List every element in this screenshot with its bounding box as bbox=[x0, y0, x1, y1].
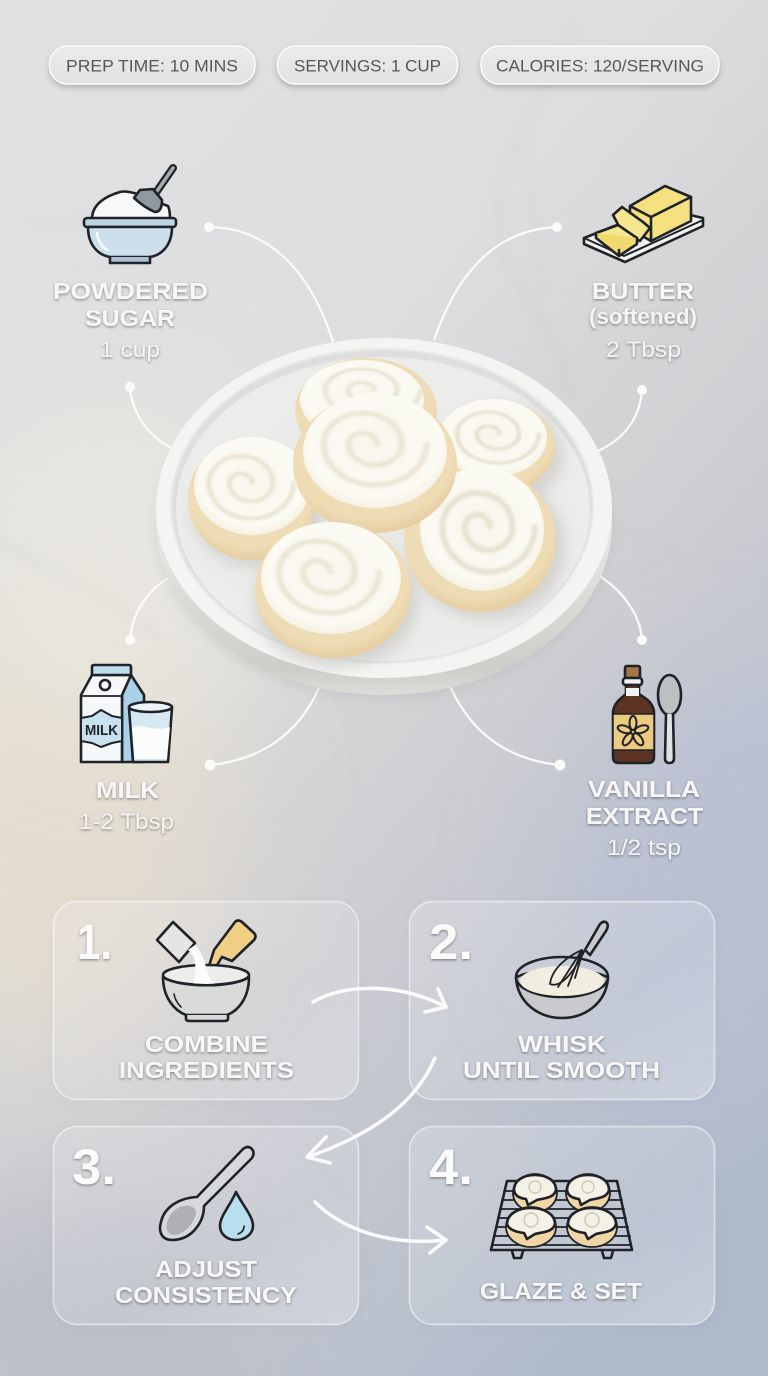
icon: pouring into bowl bbox=[157, 920, 256, 1021]
ingredient: butter bbox=[584, 186, 703, 304]
step label bbox=[463, 1031, 660, 1083]
pill: calories bbox=[481, 46, 719, 84]
label: extract: EXTRACT bbox=[586, 803, 703, 829]
cookie: left bbox=[188, 437, 316, 560]
icon: milk carton and glass bbox=[81, 665, 172, 762]
stats pills bbox=[50, 46, 719, 84]
arrow: step 3 to step 4 bbox=[315, 1202, 446, 1253]
ingredient: vanilla bbox=[613, 666, 681, 763]
panel: step 4 bbox=[410, 1126, 714, 1324]
pill: prep time bbox=[50, 46, 255, 84]
step label: CONSISTENCY bbox=[115, 1282, 297, 1308]
pill: servings: SERVINGS: 1 CUP bbox=[294, 56, 441, 76]
label: sugar: SUGAR bbox=[85, 305, 175, 331]
step number: 2. bbox=[429, 914, 473, 970]
plate bbox=[156, 338, 612, 698]
label: milk: MILK bbox=[96, 777, 159, 803]
step label: ADJUST bbox=[155, 1256, 257, 1282]
step number: 3. bbox=[72, 1139, 116, 1195]
connector lines bbox=[125, 222, 647, 770]
step label: UNTIL SMOOTH bbox=[463, 1057, 660, 1083]
step label: GLAZE & SET bbox=[480, 1278, 642, 1304]
cookie: right front bbox=[404, 467, 556, 612]
ingredient: milk bbox=[81, 665, 172, 762]
step label bbox=[115, 1256, 297, 1308]
label: POWDERED bbox=[53, 278, 208, 304]
pill: calories: CALORIES: 120/SERVING bbox=[496, 56, 704, 76]
panel: step 1 bbox=[54, 902, 358, 1100]
label: BUTTER bbox=[592, 278, 694, 304]
quantity: milk: 1-2 Tbsp bbox=[79, 809, 174, 834]
step label: COMBINE bbox=[145, 1031, 268, 1057]
ingredient: powdered sugar bbox=[53, 168, 208, 304]
step number: 1. bbox=[77, 914, 112, 970]
icon: vanilla bottle and spoon bbox=[613, 666, 681, 763]
label: vanilla: VANILLA bbox=[588, 776, 700, 802]
panel: step 3 bbox=[54, 1126, 358, 1324]
cookie: back bbox=[295, 358, 437, 462]
icon: butter on a dish bbox=[584, 186, 703, 262]
icon: spoon and droplet bbox=[160, 1147, 254, 1240]
icon: sugar bowl with scoop bbox=[84, 168, 176, 263]
cookie: right back bbox=[439, 399, 555, 493]
pill: prep time: PREP TIME: 10 MINS bbox=[66, 56, 238, 76]
arrow: step 1 to step 2 bbox=[313, 988, 446, 1012]
panel: step 2 bbox=[410, 902, 714, 1100]
step label: WHISK bbox=[518, 1031, 606, 1057]
note: softened: (softened) bbox=[589, 304, 697, 329]
step label: INGREDIENTS bbox=[119, 1057, 294, 1083]
quantity: sugar: 1 cup bbox=[100, 337, 160, 362]
arrow: step 2 to step 3 bbox=[307, 1058, 435, 1163]
icon: whisk in bowl bbox=[516, 922, 608, 1018]
cookie: center bbox=[293, 394, 457, 533]
cookie shadows bbox=[192, 405, 566, 668]
cookie: front bbox=[255, 522, 411, 658]
step number: 4. bbox=[429, 1139, 473, 1195]
pill: servings bbox=[278, 46, 458, 84]
quantity: vanilla: 1/2 tsp bbox=[607, 835, 681, 860]
icon: cookies on cooling rack bbox=[491, 1174, 632, 1258]
quantity: butter: 2 Tbsp bbox=[606, 337, 681, 362]
carton text: MILK bbox=[85, 722, 118, 739]
step label bbox=[119, 1031, 294, 1083]
plate of frosted cookies bbox=[156, 338, 612, 698]
